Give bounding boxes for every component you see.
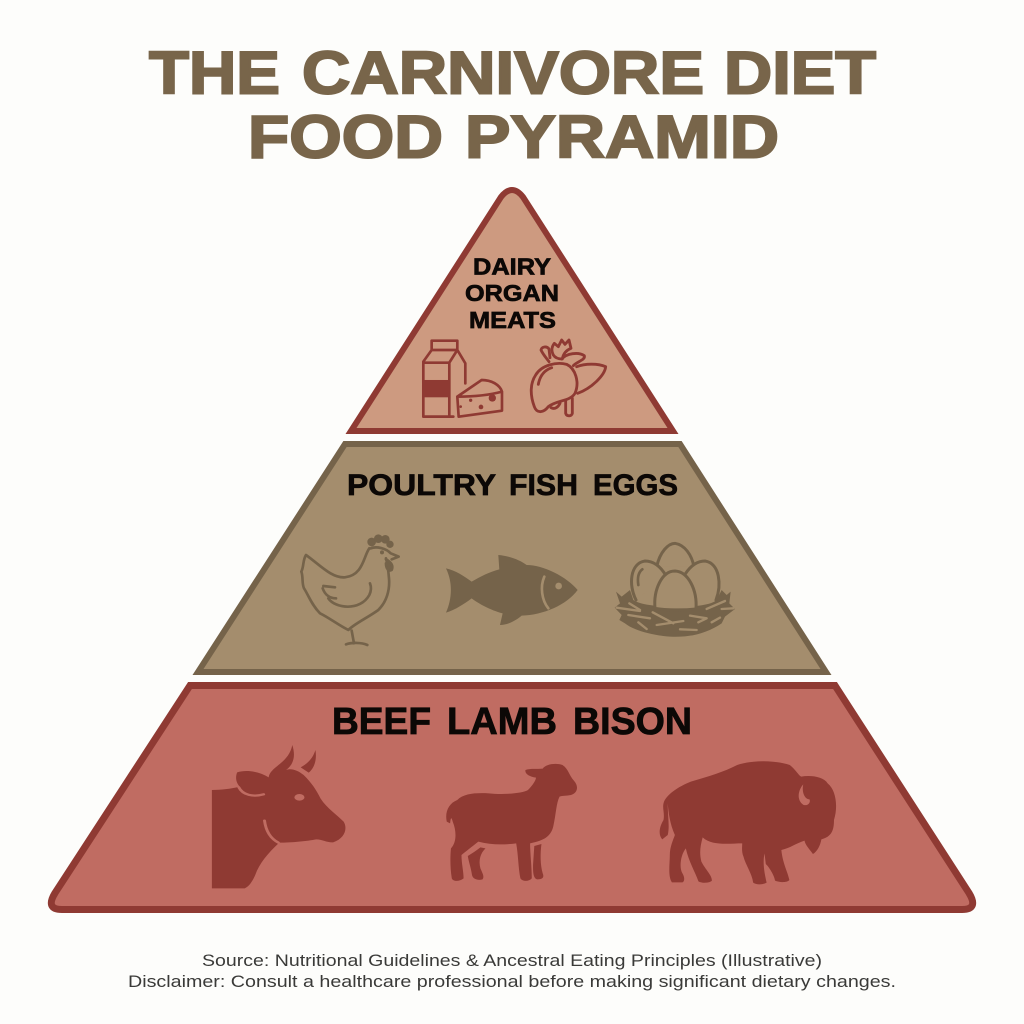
tier shape: middle xyxy=(198,444,826,672)
icon: fish xyxy=(446,555,578,625)
title xyxy=(149,40,876,170)
title: FOOD xyxy=(248,104,443,170)
icon: eggs in nest xyxy=(615,543,735,637)
tier shape: bottom xyxy=(51,686,973,910)
title: CARNIVORE xyxy=(302,40,704,106)
label: poultry fish eggs xyxy=(347,469,678,502)
title: PYRAMID xyxy=(465,104,779,170)
icon: lamb xyxy=(446,764,577,881)
label: beef lamb bison: LAMB xyxy=(447,701,557,743)
label: poultry fish eggs: FISH xyxy=(509,469,578,502)
label: dairy organ meats: DAIRY xyxy=(473,254,551,280)
label: poultry fish eggs: EGGS xyxy=(593,469,678,502)
footer: source and disclaimer: Disclaimer: Consult a healthcare professional before making significant dietary changes. xyxy=(128,972,896,991)
label: beef lamb bison xyxy=(332,701,692,743)
panel: top tier dairy and organ meats xyxy=(351,190,673,431)
panel: bottom tier beef lamb bison xyxy=(51,686,973,910)
icon: cow xyxy=(212,745,345,888)
panel: middle tier poultry fish eggs xyxy=(198,444,826,672)
title: THE xyxy=(149,40,280,106)
label: dairy organ meats: ORGAN xyxy=(465,280,559,306)
icon: heart and liver xyxy=(531,340,606,416)
icon: chicken xyxy=(301,534,399,645)
icon: milk carton and cheese xyxy=(423,341,502,417)
title: DIET xyxy=(724,40,876,106)
tier shape: top xyxy=(351,190,673,431)
label: poultry fish eggs: POULTRY xyxy=(347,469,496,502)
label: beef lamb bison: BISON xyxy=(573,701,692,743)
footer: source and disclaimer: Source: Nutritional Guidelines & Ancestral Eating Principles (Illustrative) xyxy=(202,951,822,970)
label: dairy organ meats: MEATS xyxy=(469,307,556,333)
label: beef lamb bison: BEEF xyxy=(332,701,431,743)
icon: bison xyxy=(660,761,836,884)
footer: source and disclaimer xyxy=(128,951,896,991)
label: dairy organ meats xyxy=(465,254,559,333)
